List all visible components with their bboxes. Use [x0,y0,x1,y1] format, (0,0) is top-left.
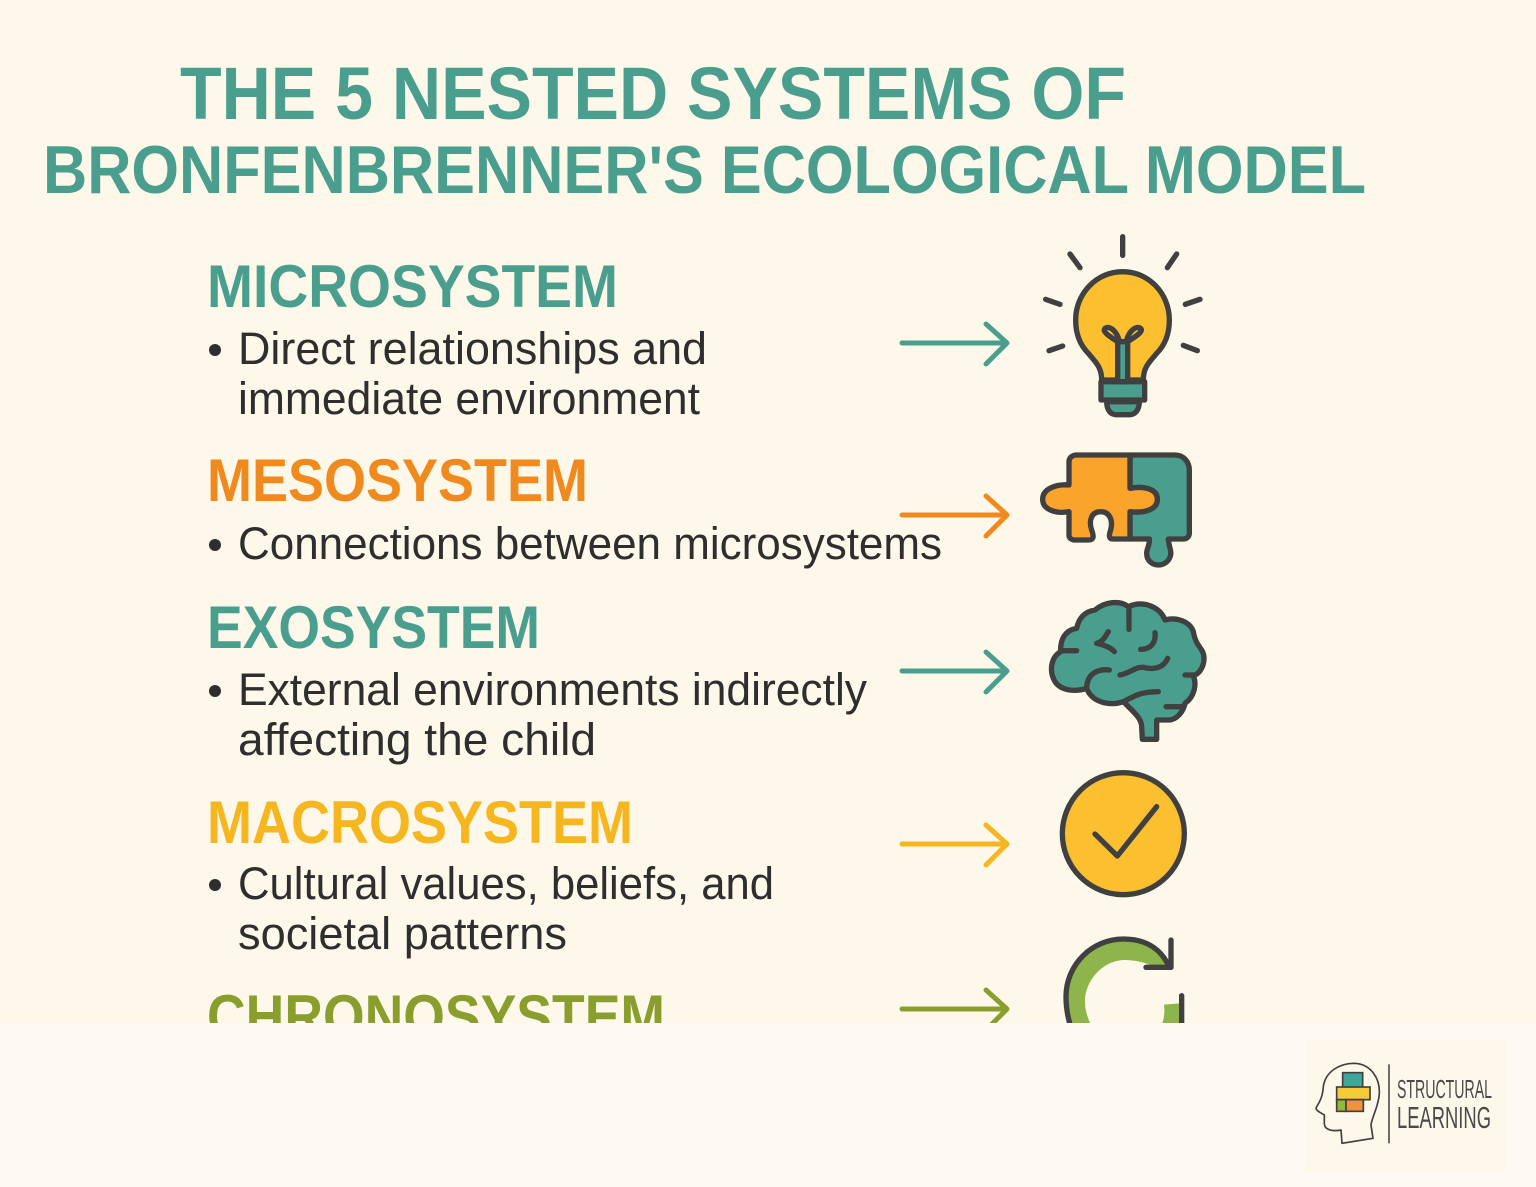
panel: mesosystem [207,447,1189,569]
logo: Structural Learning [1306,1040,1506,1172]
arrow: mesosystem [902,496,1007,536]
title [43,52,1366,208]
text: microsystem description [209,323,707,424]
icon: refresh cycle [1066,939,1182,1030]
panel: microsystem [207,237,1200,424]
text: macrosystem description [209,858,774,959]
arrow: chronosystem [902,990,1007,1030]
footer band [0,1023,1536,1187]
heading: mesosystem: MESOSYSTEM [207,447,588,514]
heading: chronosystem: CHRONOSYSTEM [207,983,665,1050]
text: exosystem description [209,664,867,765]
text: exosystem description: affecting the child [238,714,596,765]
text: exosystem description: External environments indirectly [238,664,867,715]
icon: check circle [1062,773,1184,895]
arrow: exosystem [902,652,1007,692]
text: macrosystem description: Cultural values, beliefs, and [238,858,774,909]
text: mesosystem description: Connections between microsystems [238,518,942,569]
icon: head with blocks [1316,1063,1389,1143]
text: microsystem description: immediate environment [238,373,700,424]
panel: exosystem [207,594,1204,765]
panel: chronosystem (cropped) [207,939,1182,1050]
text: macrosystem description: societal patterns [238,908,567,959]
icon: brain [1051,603,1204,739]
title: BRONFENBRENNER'S ECOLOGICAL MODEL [43,132,1366,208]
panel: macrosystem [207,773,1184,959]
text: microsystem description: Direct relationships and [238,323,707,374]
heading: microsystem: MICROSYSTEM [207,253,618,320]
title: THE 5 NESTED SYSTEMS OF [180,52,1126,135]
icon: puzzle [1043,455,1189,565]
heading: exosystem: EXOSYSTEM [207,594,540,661]
arrow: macrosystem [902,825,1007,865]
arrow: microsystem [902,324,1007,364]
icon: light bulb [1046,237,1200,415]
logo text [1397,1074,1492,1135]
heading: macrosystem: MACROSYSTEM [207,789,633,856]
